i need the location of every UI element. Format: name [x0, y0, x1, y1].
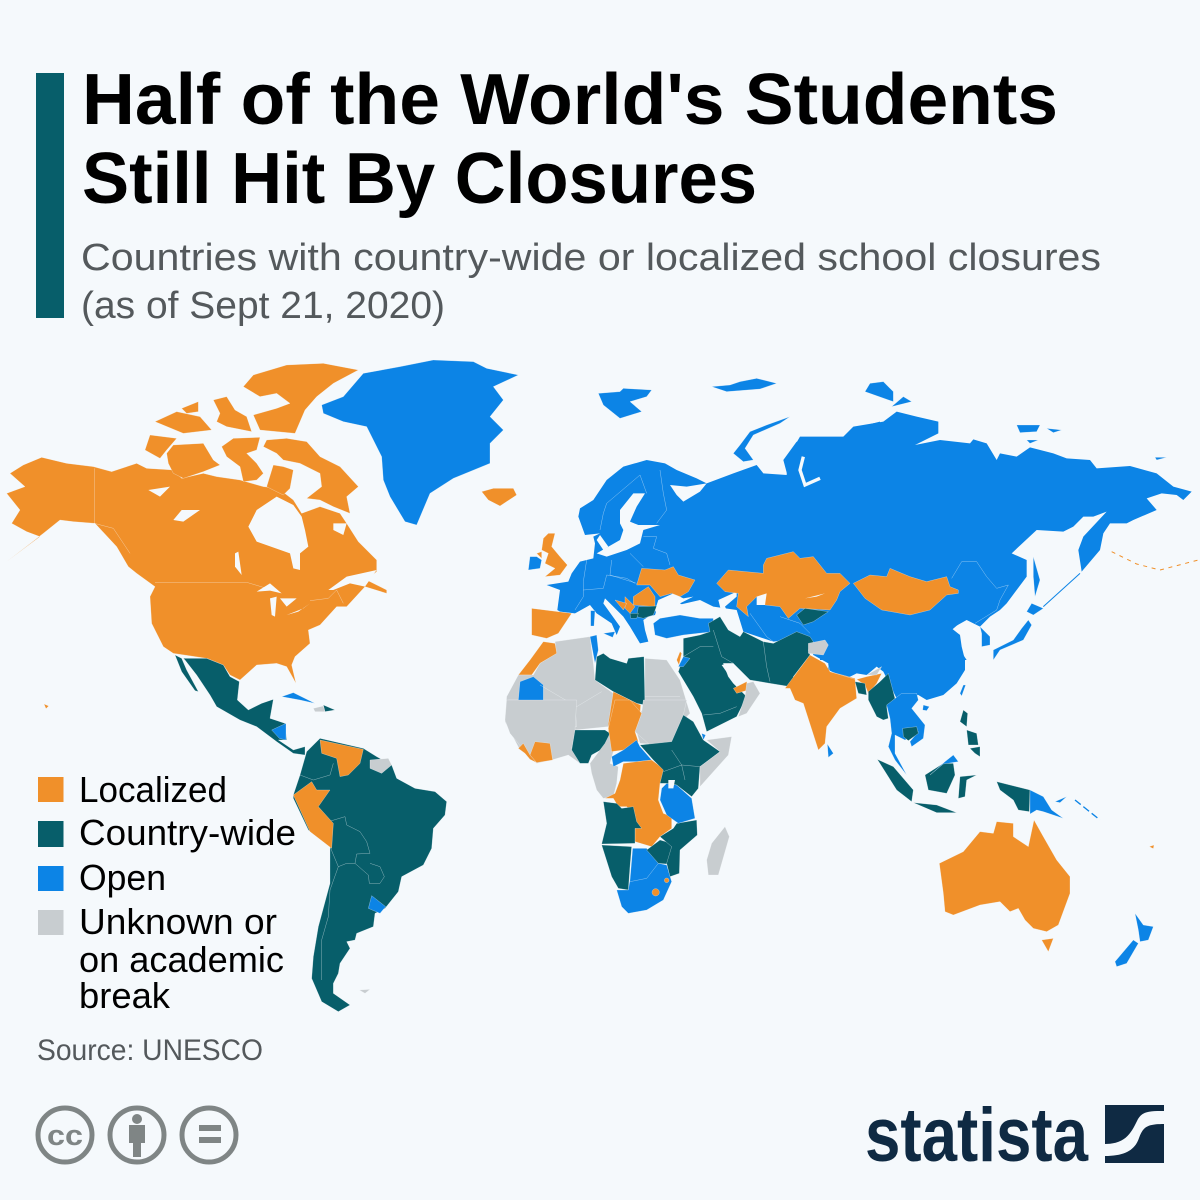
Philippines — [960, 710, 968, 727]
logo mark — [1105, 1105, 1164, 1163]
Mexico and Central America — [183, 658, 305, 755]
legend — [38, 769, 296, 1016]
Italy islands — [591, 611, 595, 626]
Japan — [993, 620, 1032, 660]
map: Sub-Saharan Africa — [505, 700, 732, 913]
Java — [913, 803, 957, 813]
Somalia — [700, 737, 732, 787]
DR Congo and Zambia — [605, 760, 672, 847]
Cambodia — [903, 727, 918, 741]
map: South America — [293, 738, 447, 1012]
subtitle: (as of Sept 21, 2020) — [81, 285, 445, 327]
Papua New Guinea — [1030, 790, 1063, 818]
Ireland — [528, 557, 542, 570]
European borders — [600, 475, 640, 530]
Djibouti — [702, 733, 706, 740]
icon: creative commons: cc — [47, 1120, 83, 1152]
Israel — [677, 652, 682, 665]
Iceland — [482, 488, 517, 506]
Egypt and Sudan — [635, 658, 690, 745]
Bulgaria — [637, 606, 657, 618]
legend: open — [38, 857, 166, 898]
title: Still Hit By Closures — [82, 139, 757, 219]
Thailand, Laos, Vietnam, Malaysia — [887, 693, 925, 775]
Hudson Bay and inland waters — [248, 497, 308, 570]
Zimbabwe — [647, 840, 672, 864]
Uruguay — [368, 896, 386, 913]
United Kingdom — [542, 533, 567, 577]
statista logo — [865, 1093, 1164, 1178]
Falklands — [359, 989, 370, 993]
title: Half of the World's Students — [82, 60, 1058, 140]
Oman — [738, 682, 760, 717]
Libya — [595, 653, 645, 705]
North Macedonia — [630, 613, 638, 618]
Boothia peninsula — [267, 465, 293, 495]
map: North America — [7, 360, 518, 755]
UAE — [733, 682, 748, 693]
title — [82, 60, 1058, 219]
Sulawesi — [958, 775, 977, 798]
map: South and East Asia, Oceania — [785, 620, 1154, 967]
Mauritania — [508, 677, 543, 723]
legend: open: Open — [79, 857, 166, 898]
Guianas — [370, 758, 392, 773]
Botswana and South Africa — [617, 848, 672, 913]
New Zealand — [1135, 913, 1153, 942]
Chad lower part — [608, 700, 642, 752]
North and West Africa, unknown — [505, 637, 613, 750]
Hawaii — [44, 704, 49, 709]
Yamal and Kara Sea coast — [783, 422, 880, 485]
Serbia and Bosnia — [625, 597, 635, 613]
Hainan — [923, 705, 929, 711]
Svalbard — [598, 388, 652, 418]
Alaska and USA borders — [94, 468, 130, 553]
Madagascar — [707, 827, 729, 875]
Ukraine — [637, 567, 695, 597]
Myanmar — [868, 673, 895, 720]
Kashmir — [808, 640, 828, 655]
Canada, USA and Alaska mainland — [7, 457, 387, 683]
Australia — [939, 820, 1070, 932]
Spain and Portugal — [532, 608, 572, 638]
wordmark: statista — [865, 1093, 1089, 1178]
icon: attribution — [110, 1108, 164, 1162]
subtitle — [81, 237, 1101, 327]
Papua — [997, 782, 1030, 812]
Sudan lower part — [635, 700, 687, 745]
map: Northeast Asia details — [853, 382, 1198, 647]
legend: localized: Localized — [79, 769, 227, 810]
legend: country-wide: Country-wide — [79, 812, 296, 853]
map: Arctic islands of Europe — [598, 378, 790, 462]
Borneo — [925, 763, 955, 793]
Franz Josef Land — [712, 378, 777, 392]
seas of Europe — [597, 493, 660, 557]
Taiwan — [960, 685, 966, 696]
Sri Lanka — [827, 744, 833, 757]
Lesotho — [652, 889, 659, 896]
Caribbean islands — [282, 693, 315, 703]
Europe and western Russia — [547, 437, 913, 643]
legend: unknown: on academic — [79, 939, 284, 980]
legend: unknown: Unknown or — [79, 901, 277, 942]
accent bar — [36, 73, 64, 318]
Kyrgyzstan — [797, 608, 828, 625]
Novaya Zemlya — [733, 417, 790, 462]
Hokkaido — [1027, 603, 1043, 615]
Peru — [293, 782, 333, 848]
Kazakhstan — [717, 552, 850, 618]
legend: unknown: break — [79, 975, 171, 1016]
icon: creative commons — [38, 1108, 92, 1162]
Greenland — [322, 360, 518, 525]
world map — [7, 360, 1198, 1012]
northeast India — [857, 673, 882, 693]
Turkey — [653, 615, 713, 638]
Fiji — [1149, 845, 1154, 849]
Namibia — [602, 845, 632, 890]
Baja California — [175, 655, 198, 692]
Angola — [602, 802, 642, 844]
eastern Russia — [820, 412, 1192, 660]
Eswatini — [664, 878, 669, 883]
East Africa — [640, 715, 720, 797]
Romania — [633, 587, 655, 607]
Venezuela — [320, 740, 363, 777]
Jordan — [678, 657, 690, 667]
Sumatra — [877, 759, 913, 802]
Lake Victoria — [668, 780, 675, 788]
Sarawak — [930, 755, 958, 775]
Mozambique and Malawi — [660, 820, 697, 877]
Nicaragua — [272, 723, 286, 740]
source: Source: UNESCO — [37, 1034, 263, 1067]
Arctic islands of Canada — [263, 438, 358, 513]
China — [757, 600, 965, 700]
Algeria-Niger border lines — [540, 685, 602, 707]
subtitle: Countries with country-wide or localized school closures — [81, 237, 1101, 279]
Bhutan — [867, 667, 882, 675]
legend: unknown — [38, 901, 284, 1016]
Tasmania — [1042, 938, 1053, 952]
Bangladesh — [855, 682, 867, 695]
Mongolia — [853, 568, 958, 615]
Sakhalin — [1033, 557, 1040, 597]
Tunisia — [590, 635, 598, 663]
map: open-country base of Europe and Asia — [547, 412, 1192, 700]
India — [785, 655, 857, 750]
West Africa, unknown — [505, 700, 580, 763]
Korea — [980, 627, 990, 647]
Arctic islands of Siberia — [865, 382, 893, 402]
Kuril and Aleutian arcs — [1043, 573, 1080, 607]
Nigeria — [572, 730, 610, 763]
Central Africa, unknown — [590, 733, 618, 798]
Middle East and South Asia — [678, 617, 813, 732]
Morocco — [518, 642, 557, 675]
Tanzania — [660, 783, 695, 823]
icon: no derivatives — [182, 1108, 236, 1162]
Central African Republic — [612, 740, 652, 767]
Guinea, Liberia, Ivory Coast — [518, 743, 537, 763]
Brazil, Colombia, Argentina and neighbours — [293, 738, 447, 1012]
map: Europe, Middle East, North Africa — [482, 457, 850, 750]
Chad — [608, 692, 641, 750]
